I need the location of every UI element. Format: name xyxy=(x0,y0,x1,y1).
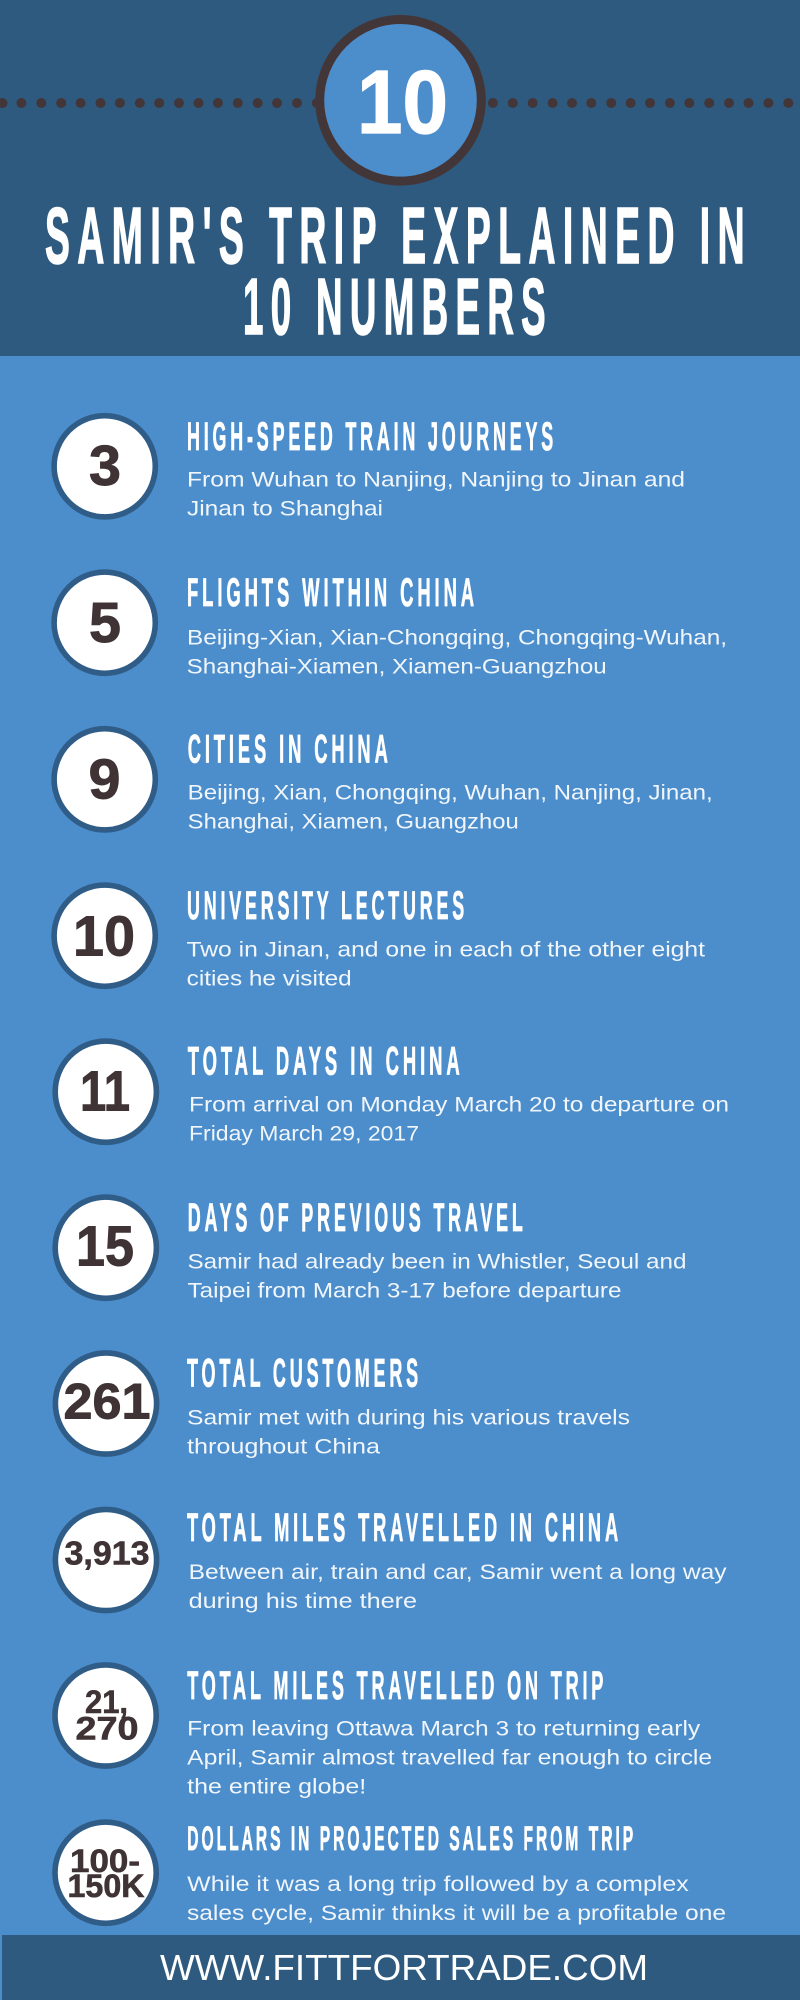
description: From leaving Ottawa March 3 to returning early xyxy=(187,1716,700,1740)
description xyxy=(189,1093,729,1146)
row: 261 total customers xyxy=(55,1352,630,1458)
number badge: 21,270: 270 xyxy=(76,1710,138,1746)
number badge: 3: 3 xyxy=(89,434,121,498)
dotted line xyxy=(0,98,793,108)
number badge: 3 xyxy=(54,416,155,517)
description: Taipei from March 3-17 before departure xyxy=(188,1279,622,1303)
description: throughout China xyxy=(187,1434,380,1458)
description: sales cycle, Samir thinks it will be a profitable one xyxy=(187,1901,726,1925)
number badge: 10: 10 xyxy=(73,905,135,969)
description xyxy=(187,468,685,521)
number badge: 5: 5 xyxy=(89,591,121,655)
number badge: 11 xyxy=(55,1041,156,1142)
number badge: 11: 11 xyxy=(80,1060,130,1124)
number badge: 21,270 xyxy=(55,1665,156,1766)
description: April, Samir almost travelled far enough to circle xyxy=(187,1745,712,1769)
description: Between air, train and car, Samir went a long way xyxy=(189,1560,727,1584)
description: While it was a long trip followed by a complex xyxy=(187,1872,689,1896)
number badge: 21,270: 21, xyxy=(85,1684,128,1720)
number badge: 100-150K: 150K xyxy=(68,1868,144,1904)
row: 5 flights within China xyxy=(54,571,727,678)
number badge: 5 xyxy=(54,572,155,673)
row: 100-150K dollars in projected sales xyxy=(55,1820,726,1925)
number badge: 10 xyxy=(54,885,155,986)
description xyxy=(188,780,713,834)
row: 3 high-speed train journeys xyxy=(54,415,685,521)
description: From arrival on Monday March 20 to departure on xyxy=(189,1093,729,1117)
description: Shanghai, Xiamen, Guangzhou xyxy=(188,810,519,834)
row: 261 total customers: TOTAL CUSTOMERS xyxy=(187,1352,422,1396)
description: Friday March 29, 2017 xyxy=(189,1122,419,1146)
number badge: 261: 261 xyxy=(64,1373,150,1429)
description: Two in Jinan, and one in each of the other eight xyxy=(186,938,705,962)
row: 10 university lectures xyxy=(54,884,705,991)
description: Samir met with during his various travels xyxy=(187,1405,630,1429)
description xyxy=(187,1405,630,1458)
description xyxy=(189,1560,727,1613)
description: Samir had already been in Whistler, Seoul and xyxy=(188,1250,686,1274)
website url: WWW.FITTFORTRADE.COM xyxy=(160,1947,648,1988)
panel: header xyxy=(0,0,800,356)
number badge: 100-150K xyxy=(55,1822,156,1923)
description xyxy=(188,1250,686,1303)
description: Shanghai-Xiamen, Xiamen-Guangzhou xyxy=(187,654,607,678)
row: 15 days of previous travel xyxy=(55,1196,686,1303)
description: during his time there xyxy=(189,1589,417,1613)
number badge: 9 xyxy=(54,729,155,830)
row: 9 cities in China: CITIES IN CHINA xyxy=(188,727,392,771)
badge: 10: 10 xyxy=(357,53,448,153)
row: 11 total days in China xyxy=(55,1039,729,1146)
description: cities he visited xyxy=(187,967,352,991)
description: From Wuhan to Nanjing, Nanjing to Jinan and xyxy=(187,468,685,492)
number badge: 3,913: 3,913 xyxy=(64,1534,150,1572)
number badge: 100-150K: 100- xyxy=(70,1843,140,1879)
row: 3,913 total miles travelled in China xyxy=(55,1506,727,1613)
description: Beijing-Xian, Xian-Chongqing, Chongqing-Wuhan, xyxy=(187,625,727,649)
title xyxy=(45,191,752,351)
description: Beijing, Xian, Chongqing, Wuhan, Nanjing, Jinan, xyxy=(188,780,713,804)
number badge: 15 xyxy=(55,1197,156,1298)
description xyxy=(187,1872,726,1925)
number badge: 9: 9 xyxy=(88,748,120,812)
description: the entire globe! xyxy=(187,1774,366,1798)
number badge: 261 xyxy=(55,1353,157,1454)
number badge: 3,913 xyxy=(55,1509,157,1611)
description xyxy=(186,938,705,991)
number badge: 15: 15 xyxy=(76,1215,134,1279)
row: 11 total days in China: TOTAL DAYS IN CHINA xyxy=(188,1039,464,1083)
description xyxy=(187,1716,712,1798)
row: 21,270 total miles travelled on trip xyxy=(55,1664,712,1798)
description xyxy=(187,625,727,678)
footer xyxy=(2,1935,800,2000)
row: 10 university lectures: UNIVERSITY LECTURES xyxy=(187,884,468,928)
row: 9 cities in China xyxy=(54,727,713,834)
badge: 10 xyxy=(320,20,481,181)
description: Jinan to Shanghai xyxy=(187,497,383,521)
